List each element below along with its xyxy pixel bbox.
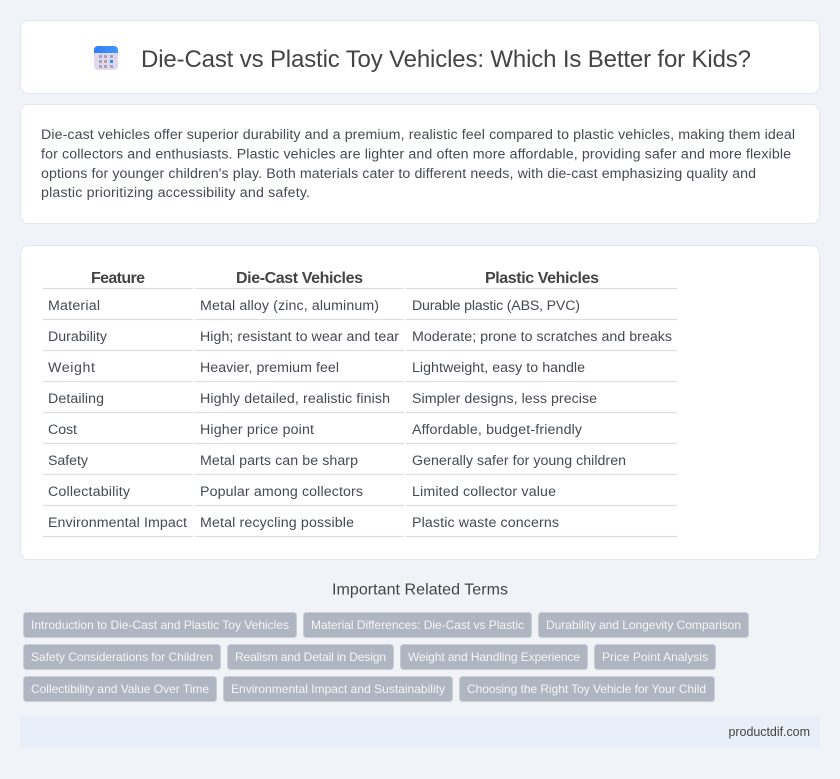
footer <box>20 715 820 749</box>
table header row: Die-Cast Vehicles <box>236 270 363 287</box>
chip: choosing: Choosing the Right Toy Vehicle for Your Child <box>467 682 706 696</box>
table header row: Feature <box>91 270 145 287</box>
row: environmental impact: Metal recycling possible <box>200 515 354 531</box>
row: cost: Higher price point <box>200 422 314 438</box>
row: collectability: Collectability <box>48 484 131 500</box>
row: durability: High; resistant to wear and tear <box>200 329 399 345</box>
chip: material differences: Material Differences: Die-Cast vs Plastic <box>311 618 524 632</box>
row: durability: Durability <box>48 329 108 345</box>
row: collectability: Popular among collectors <box>200 484 363 500</box>
row: detailing <box>48 391 597 407</box>
chip: durability <box>538 612 748 638</box>
chip: realism: Realism and Detail in Design <box>235 650 386 664</box>
chip: collectibility: Collectibility and Value Over Time <box>31 682 209 696</box>
chip: environmental: Environmental Impact and Sustainability <box>231 682 445 696</box>
chip: price: Price Point Analysis <box>602 650 708 664</box>
panel: related term chips <box>24 612 748 702</box>
panel: introduction <box>20 104 820 224</box>
table header row: Plastic Vehicles <box>485 270 599 287</box>
chip: safety: Safety Considerations for Children <box>31 650 213 664</box>
title: Die-Cast vs Plastic Toy Vehicles: Which Is Better for Kids? <box>141 46 751 73</box>
footer: productdif.com <box>728 725 810 739</box>
heading: related terms: Important Related Terms <box>332 582 508 598</box>
chip: price <box>594 644 716 670</box>
chip: collectibility <box>24 676 216 702</box>
row: weight: Heavier, premium feel <box>200 360 339 376</box>
table header row <box>91 270 599 287</box>
chip: introduction: Introduction to Die-Cast and Plastic Toy Vehicles <box>31 618 289 632</box>
chip: environmental <box>224 676 452 702</box>
chip: choosing <box>460 676 714 702</box>
row: durability: Moderate; prone to scratches and breaks <box>412 329 672 345</box>
row: safety <box>48 453 626 469</box>
chip: realism <box>228 644 394 670</box>
row: material: Durable plastic (ABS, PVC) <box>412 298 580 314</box>
chip: introduction <box>24 612 296 638</box>
row: material: Material <box>48 298 100 314</box>
row: weight: Lightweight, easy to handle <box>412 360 585 376</box>
chip: safety <box>24 644 220 670</box>
chip: weight <box>400 644 588 670</box>
text block: introduction paragraph: Die-cast vehicles offer superior durability and a premium, realistic feel compared to plastic vehicles, making them ideal <box>41 127 795 143</box>
row: durability <box>48 329 672 345</box>
row: weight: Weight <box>48 360 95 376</box>
row: cost: Affordable, budget-friendly <box>412 422 583 438</box>
row: environmental impact: Plastic waste concerns <box>412 515 559 531</box>
text block: introduction paragraph <box>41 127 795 201</box>
row: material: Metal alloy (zinc, aluminum) <box>200 298 379 314</box>
chip: weight: Weight and Handling Experience <box>408 650 580 664</box>
row: detailing: Highly detailed, realistic finish <box>200 391 390 407</box>
row: detailing: Simpler designs, less precise <box>412 391 597 407</box>
row: cost: Cost <box>48 422 77 438</box>
panel: comparison table <box>20 246 820 560</box>
icon: calendar <box>94 46 118 70</box>
row: safety: Metal parts can be sharp <box>200 453 358 469</box>
chip: material differences <box>304 612 532 638</box>
chip: durability: Durability and Longevity Comparison <box>546 618 741 632</box>
row: detailing: Detailing <box>48 391 104 407</box>
row: collectability: Limited collector value <box>412 484 556 500</box>
text block: introduction paragraph: options for younger children's play. Both materials cater to different needs, with die-cast emphasizing quality and <box>41 166 756 182</box>
text block: introduction paragraph: for collectors and enthusiasts. Plastic vehicles are lighter and often more affordable, providing safer and more flexible <box>41 146 791 162</box>
row: collectability <box>48 484 556 500</box>
row: safety: Safety <box>48 453 89 469</box>
row: environmental impact <box>48 515 559 531</box>
row: cost <box>48 422 583 438</box>
panel: header <box>20 20 820 94</box>
row: material <box>48 298 580 314</box>
text block: introduction paragraph: plastic prioritizing accessibility and safety. <box>41 185 310 201</box>
row: weight <box>48 360 585 376</box>
row: environmental impact: Environmental Impact <box>48 515 187 531</box>
row: safety: Generally safer for young children <box>412 453 626 469</box>
